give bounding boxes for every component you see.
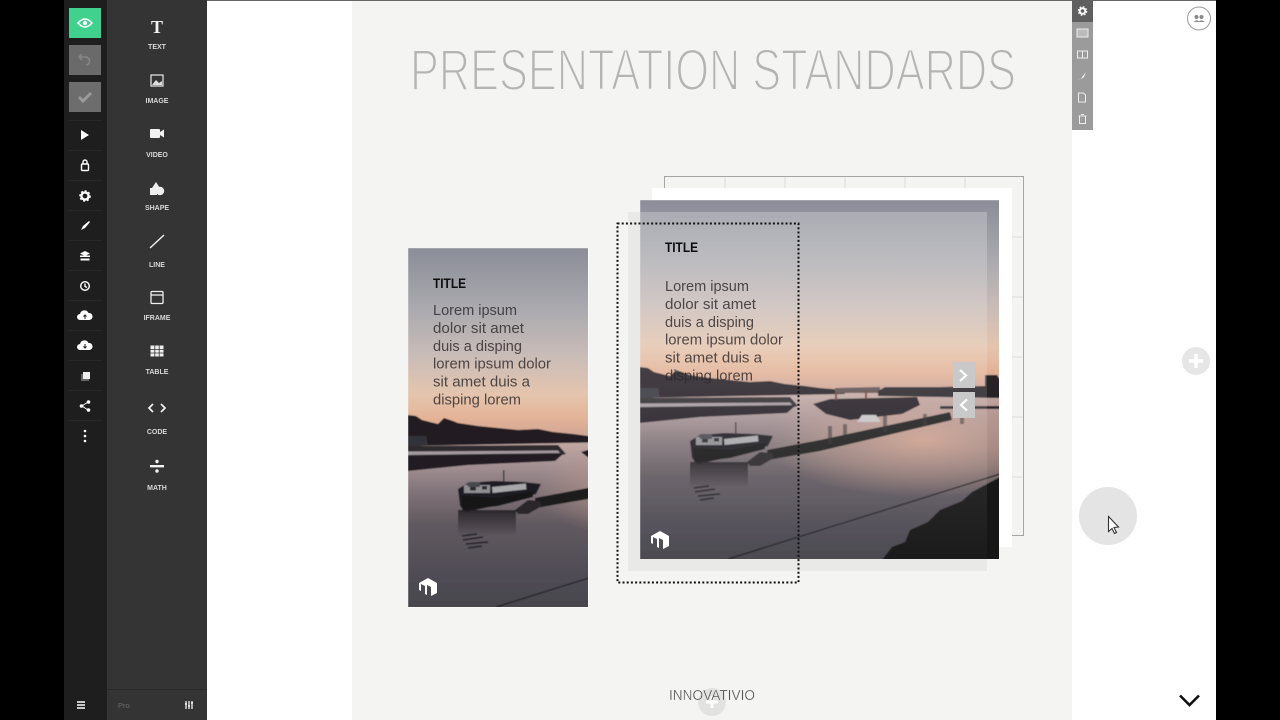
tool: table: TABLE	[146, 369, 169, 376]
tool: math	[147, 460, 167, 492]
icon: undo button	[69, 45, 101, 75]
icon: slide	[1077, 29, 1088, 37]
icon: file	[1078, 93, 1086, 102]
card: narrow photo	[408, 248, 588, 607]
left black margin	[0, 0, 64, 720]
icon: settings gear	[80, 191, 90, 201]
icon: share	[80, 401, 90, 411]
tool: code	[147, 404, 167, 436]
icon: more dots	[84, 430, 86, 442]
tool: iframe: IFRAME	[144, 315, 171, 322]
right slide toolbar	[1072, 0, 1093, 130]
white workspace background	[207, 0, 1216, 720]
grey offset shadow	[628, 212, 987, 571]
icon: sliders	[185, 701, 193, 709]
icon: logo	[419, 578, 437, 596]
button: previous arrow	[953, 392, 975, 418]
tool: text	[148, 17, 167, 51]
white frame behind photo	[652, 188, 1012, 547]
footer brand: INNOVATIVIO	[669, 687, 755, 704]
table grid behind	[664, 176, 1024, 536]
card body text: disping lorem	[433, 392, 521, 408]
button: next arrow	[953, 362, 975, 388]
card body text: duis a disping	[433, 338, 522, 355]
tool: text: TEXT	[148, 44, 167, 51]
icon: clock	[81, 282, 89, 290]
icon toolbar	[64, 0, 107, 720]
tool: shape	[145, 182, 169, 212]
tool: video	[146, 129, 168, 159]
tool: line: LINE	[149, 262, 165, 269]
pro label: Pro	[118, 701, 130, 710]
icon: cloud upload	[77, 310, 93, 320]
card heading: TITLE	[433, 275, 466, 291]
icon: brush	[81, 221, 90, 230]
icon: logo	[651, 531, 669, 549]
tool: image	[146, 75, 169, 105]
title: PRESENTATION STANDARDS	[410, 38, 1016, 103]
icon: layers	[80, 251, 90, 260]
card body text: sit amet duis a	[433, 374, 531, 390]
icon: lock	[82, 160, 88, 170]
card body text	[665, 278, 783, 384]
tool: video: VIDEO	[146, 152, 168, 159]
icon: chevron down	[1180, 696, 1199, 705]
tool: shape: SHAPE	[145, 205, 169, 212]
card body text: disping lorem	[665, 368, 753, 384]
card body text: duis a disping	[665, 314, 754, 331]
icon: images	[81, 372, 90, 381]
icon: collaborators circle	[1188, 7, 1210, 30]
tool: table	[146, 345, 169, 376]
icon: cloud download	[77, 340, 93, 350]
tool: code: CODE	[147, 429, 167, 436]
add button: bottom	[698, 688, 726, 716]
icon: hamburger menu	[77, 702, 85, 708]
icon: play	[81, 130, 89, 140]
tool: iframe	[144, 292, 171, 322]
card body text: Lorem ipsum	[665, 278, 749, 295]
icon: trash	[1078, 114, 1086, 124]
card body text	[433, 302, 551, 408]
card body text: dolor sit amet	[665, 296, 757, 313]
tool: text: T	[151, 17, 163, 37]
tool: line	[149, 235, 165, 269]
icon: bolt	[1078, 72, 1086, 80]
tools panel	[107, 0, 207, 720]
tool: math: MATH	[147, 485, 167, 492]
icon: book	[1078, 51, 1088, 58]
icon: preview eye button	[69, 8, 101, 38]
add button: right	[1182, 347, 1210, 375]
card body text: sit amet duis a	[665, 350, 763, 366]
card heading: TITLE	[665, 239, 698, 255]
card body text: lorem ipsum dolor	[665, 332, 783, 348]
tool: image: IMAGE	[146, 98, 169, 105]
card body text: Lorem ipsum	[433, 302, 517, 319]
icon: gear	[1078, 7, 1087, 15]
dotted selection box	[618, 224, 798, 582]
card: wide photo	[640, 200, 999, 559]
card body text: lorem ipsum dolor	[433, 356, 551, 372]
icon: confirm button	[69, 82, 101, 112]
right black margin	[1216, 0, 1280, 720]
slide canvas	[352, 0, 1072, 720]
card body text: dolor sit amet	[433, 320, 525, 337]
translucent overlay	[640, 212, 987, 559]
cursor highlight	[1079, 487, 1137, 545]
